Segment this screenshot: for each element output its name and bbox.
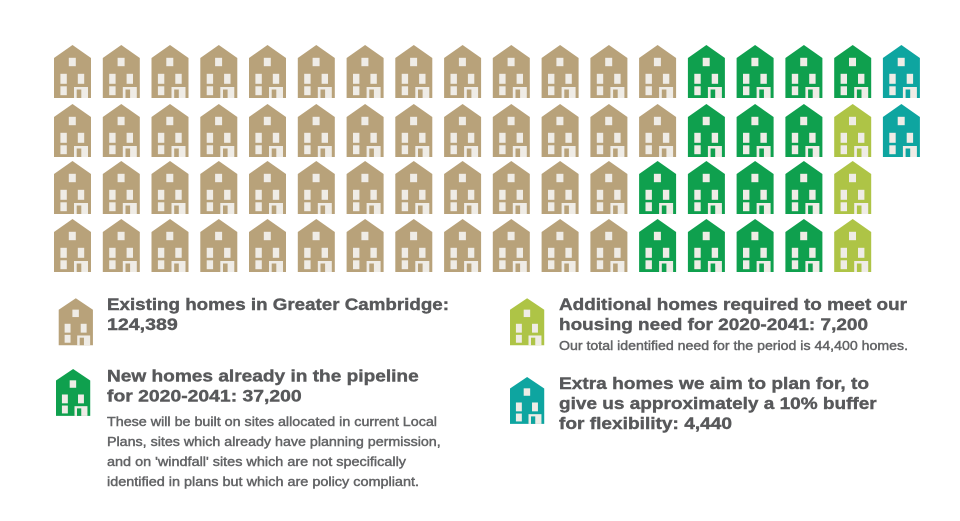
legend: existing homes xyxy=(59,295,449,345)
row 4 of houses xyxy=(54,219,871,272)
icon: teal house xyxy=(510,377,544,424)
extra homes heading: for flexibility: 4,440 xyxy=(559,414,732,433)
row 1 of houses xyxy=(54,45,920,98)
existing homes heading xyxy=(107,295,449,334)
row 3 of houses xyxy=(54,161,871,214)
additional homes heading: Additional homes required to meet our xyxy=(559,295,908,314)
legend: extra homes xyxy=(510,374,877,433)
pipeline heading: New homes already in the pipeline xyxy=(107,366,419,386)
icon: tan house xyxy=(59,298,93,345)
additional homes heading xyxy=(559,295,908,334)
legend: additional homes xyxy=(510,295,908,353)
existing homes heading: Existing homes in Greater Cambridge: xyxy=(107,295,449,314)
existing homes heading: 124,389 xyxy=(107,315,178,334)
extra homes heading xyxy=(559,374,877,433)
pipeline description xyxy=(107,414,441,489)
pipeline description: These will be built on sites allocated in current Local xyxy=(107,414,437,429)
extra homes heading: give us approximately a 10% buffer xyxy=(559,394,877,413)
pipeline description: and on 'windfall' sites which are not specifically xyxy=(107,454,406,469)
row 2 of houses xyxy=(54,104,920,157)
pipeline description: Plans, sites which already have planning permission, xyxy=(107,434,441,449)
icon: lime house xyxy=(510,298,544,345)
additional homes heading: housing need for 2020-2041: 7,200 xyxy=(559,315,868,334)
house grid xyxy=(54,45,920,272)
pipeline description: identified in plans but which are policy compliant. xyxy=(107,474,419,489)
icon: green house xyxy=(56,369,90,416)
total need note: Our total identified need for the period is 44,400 homes. xyxy=(559,338,908,353)
legend: pipeline homes xyxy=(56,366,441,489)
pipeline heading xyxy=(107,366,419,406)
extra homes heading: Extra homes we aim to plan for, to xyxy=(559,374,869,393)
pipeline heading: for 2020-2041: 37,200 xyxy=(107,386,302,406)
